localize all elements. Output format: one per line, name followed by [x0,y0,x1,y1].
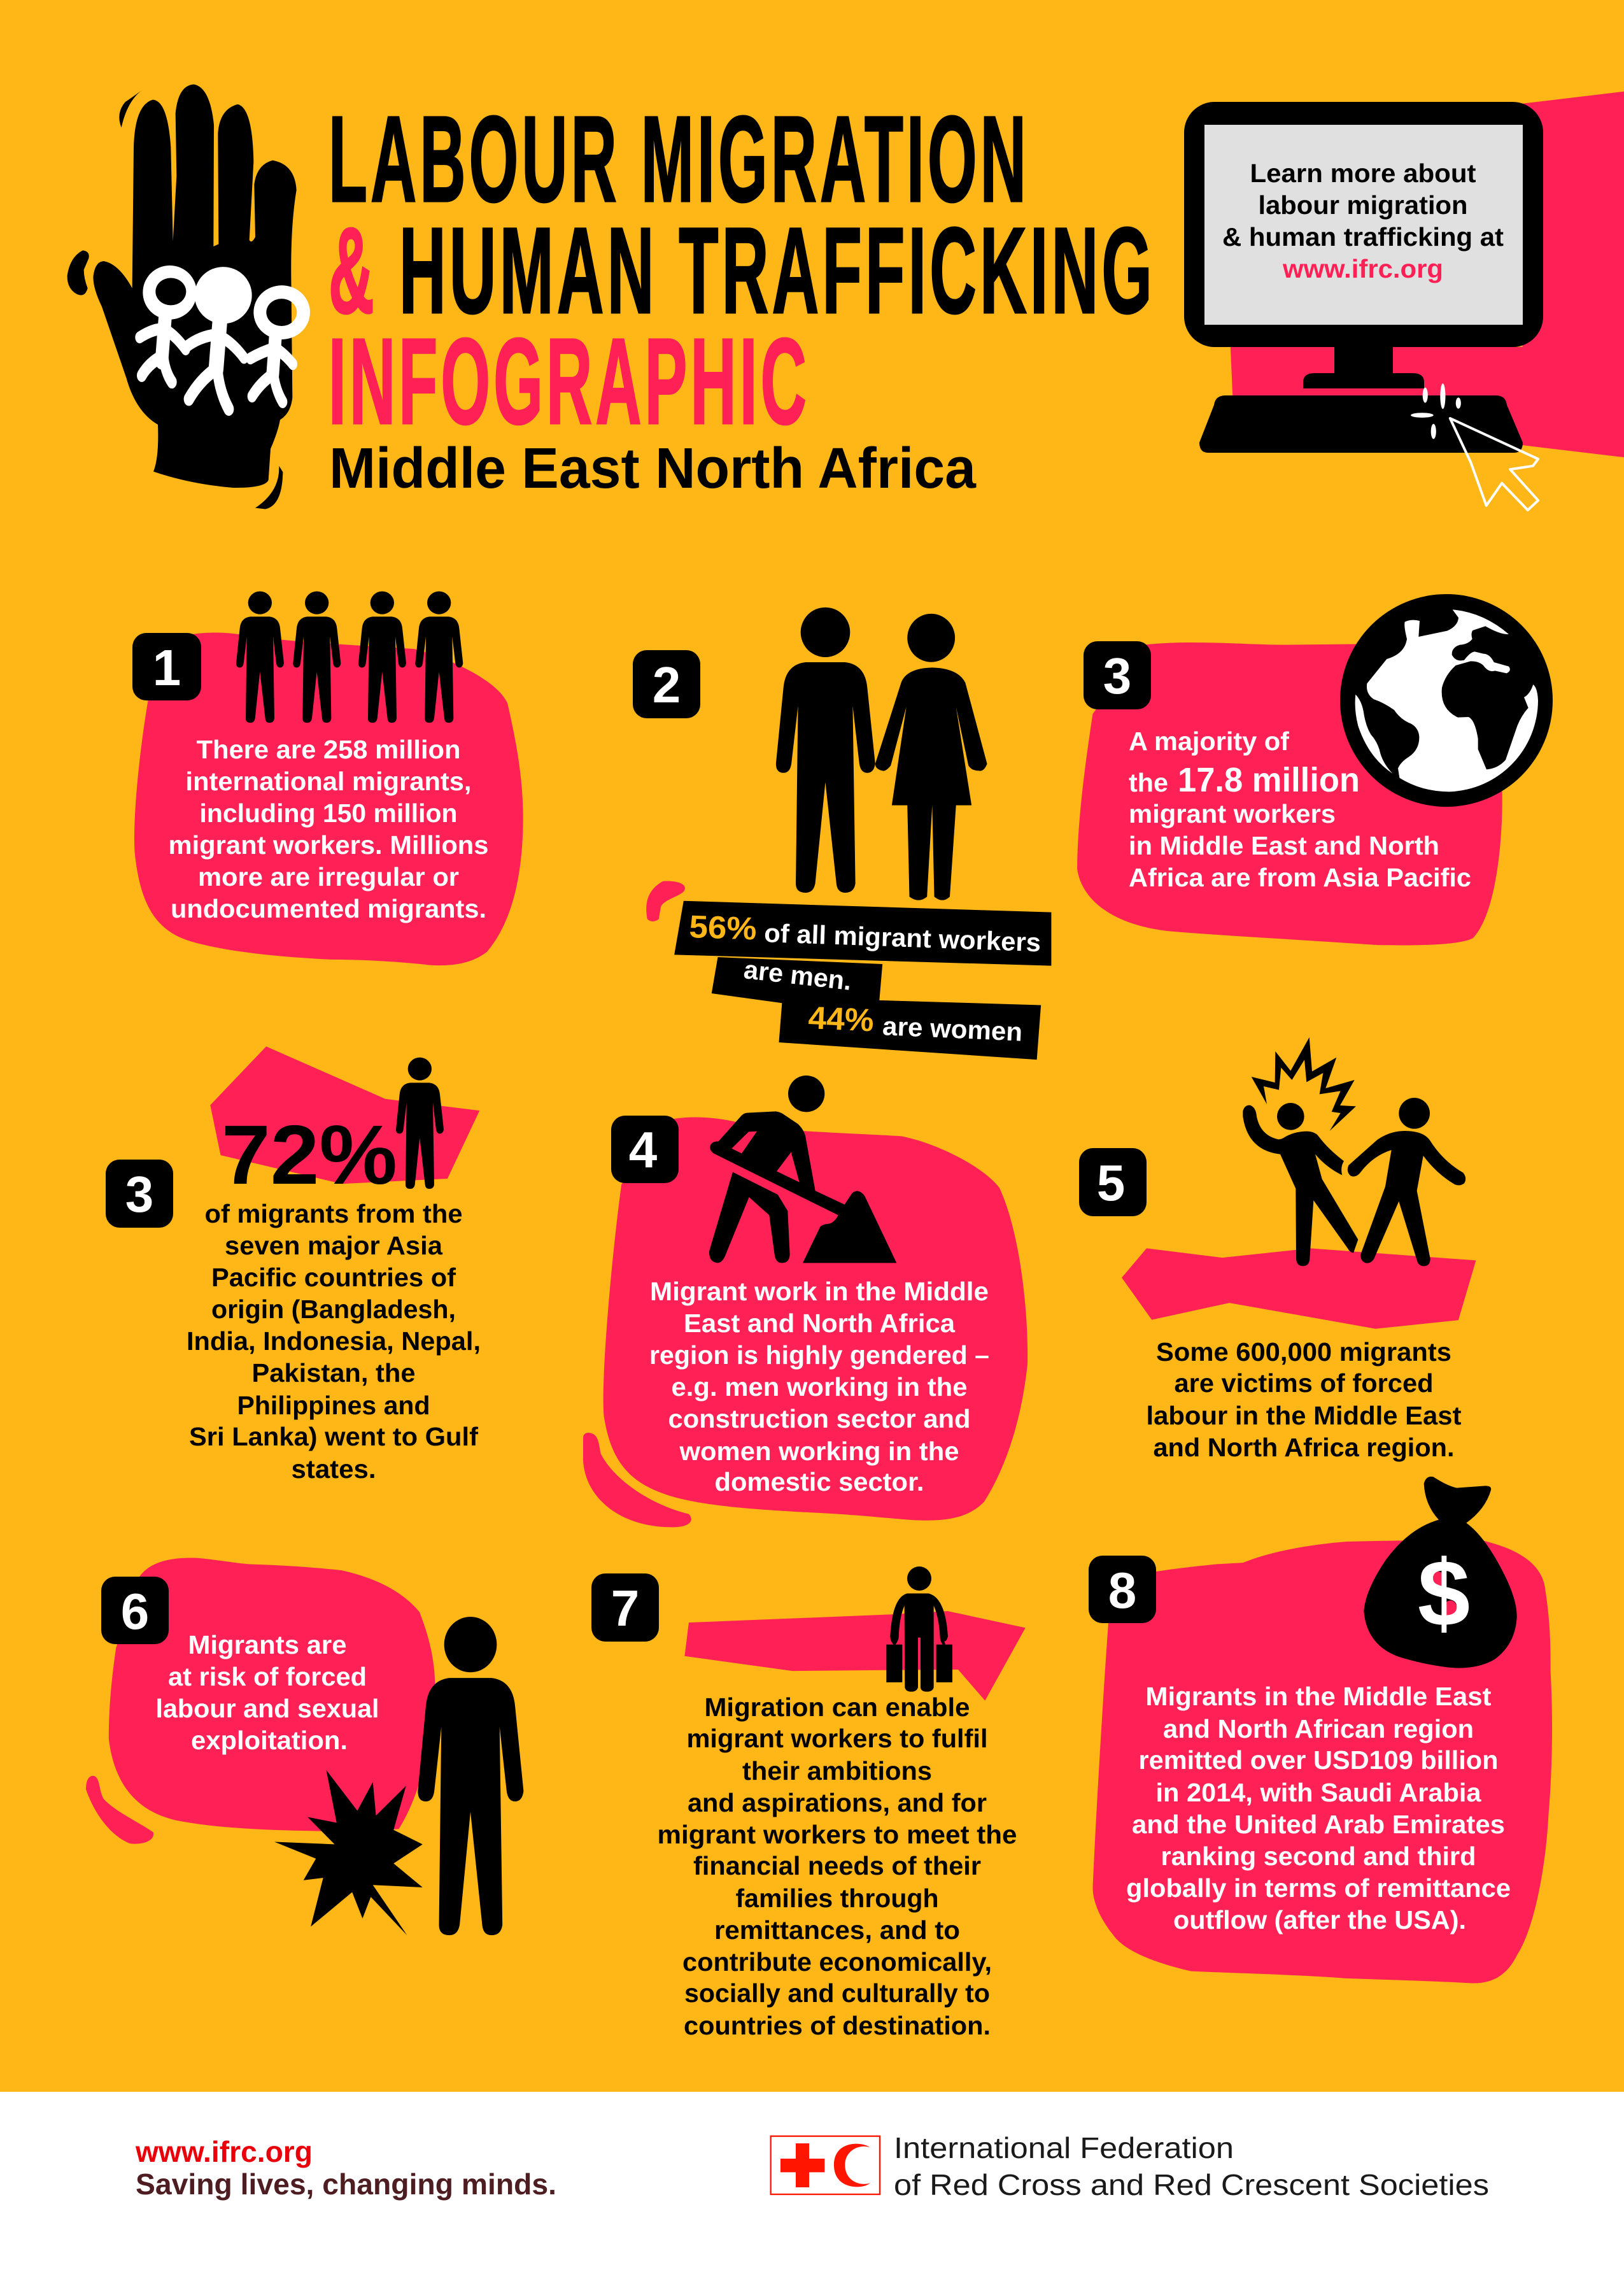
text: panel 4 [649,1277,989,1496]
text: panel 1: migrant workers. Millions [168,830,489,860]
text: panel 8: and the United Arab Emirates [1132,1810,1505,1839]
title [328,90,1155,501]
text: panel 4: construction sector and [668,1404,970,1433]
panel 1: migrants [134,592,523,965]
icon: person [396,1058,444,1189]
text: gulf states: Philippines and [237,1391,430,1420]
screen text: & human trafficking at [1222,222,1504,252]
title: INFOGRAPHIC [328,313,810,450]
footer tagline [135,2135,556,2201]
IFRC name [894,2131,1489,2201]
text: panel 8: remitted over USD109 billion [1138,1745,1499,1775]
text: panel 5: and North Africa region. [1154,1433,1454,1462]
text: gulf states: seven major Asia [225,1231,443,1260]
text: panel 3: migrant workers [1129,799,1336,828]
text: gulf states: origin (Bangladesh, [211,1295,456,1324]
icon: cursor [1411,383,1538,510]
panel: 72% gulf states [210,1046,479,1202]
badge 2: 2 [653,657,681,713]
badge 5 [1079,1148,1147,1216]
text: gulf states: states. [292,1454,376,1484]
text: gender split [689,909,1041,1047]
icon: money bag [1364,1477,1517,1668]
text: panel 1: including 150 million [200,799,457,828]
text: panel 7: migrant workers to fulfil [686,1724,988,1753]
badge 3 second: 3 [125,1166,153,1223]
text: gulf states: Pakistan, the [252,1358,415,1388]
icon: man [776,607,875,893]
text: panel 4: e.g. men working in the [671,1372,968,1402]
panel 8: remittances [1092,1540,1552,1984]
panel 2: woman and banners [646,614,1051,1060]
badge 7: 7 [611,1580,639,1636]
footer tagline: Saving lives, changing minds. [136,2168,556,2201]
text: panel 6: Migrants are [188,1630,346,1659]
text: panel 7: families through [736,1884,938,1913]
text: panel 3: Africa are from Asia Pacific [1129,863,1471,892]
badge 1: 1 [153,639,181,696]
text: panel 6: exploitation. [191,1726,348,1755]
text: panel 7: migrant workers to meet the [657,1820,1017,1849]
text: panel 1: There are 258 million [196,735,461,764]
icon: IFRC emblem [771,2136,880,2194]
panel 3: Asia Pacific [1077,643,1502,945]
text: panel 7: their ambitions [742,1756,932,1786]
text: panel 6: labour and sexual [155,1694,379,1723]
badge 8: 8 [1108,1562,1136,1619]
text: panel 1: undocumented migrants. [171,894,486,923]
text: panel 5 [1146,1337,1462,1462]
screen text: Learn more about [1250,159,1476,188]
text: gulf states: Pacific countries of [211,1263,456,1292]
text: panel 4: women working in the [679,1437,959,1466]
text: gender split: of all migrant workers [764,918,1041,957]
panel: learn more monitor [1184,92,1624,510]
text: gender split: 56% [689,909,758,947]
footer tagline: www.ifrc.org [135,2135,313,2168]
icon: explosion [274,1770,423,1935]
text: panel 7: socially and culturally to [684,1978,990,2008]
icon: four people [236,592,463,723]
text: panel 3 [1129,727,1471,892]
panel 4: gendered work [583,1118,1027,1527]
dollar sign: $ [1418,1541,1470,1646]
IFRC name: of Red Cross and Red Crescent Societies [894,2168,1489,2201]
badge 4: 4 [629,1121,658,1178]
text: panel 1: more are irregular or [198,862,459,891]
badge 3: 3 [1103,648,1131,704]
text: panel 4: domestic sector. [714,1467,924,1496]
text: panel 1: international migrants, [186,767,471,796]
text: panel 3: the [1129,768,1168,797]
text: panel 4: region is highly gendered – [649,1340,989,1370]
text: panel 3: 17.8 million [1178,761,1360,799]
text: panel 8: outflow (after the USA). [1173,1905,1466,1935]
IFRC name: International Federation [894,2131,1234,2164]
icon: standing person [418,1617,523,1935]
badge 5: 5 [1097,1154,1125,1211]
text: gulf states: India, Indonesia, Nepal, [187,1326,481,1356]
text: panel 5: labour in the Middle East [1146,1401,1462,1430]
text: panel 7: remittances, and to [714,1915,960,1945]
text: panel 1 [168,735,489,923]
badge 7 [591,1573,659,1642]
text: panel 7: countries of destination. [684,2011,991,2040]
badge 1 [132,633,201,700]
text: panel 6 [155,1630,379,1755]
text: panel 7 [657,1693,1017,2040]
badge 6 [101,1577,169,1644]
text: gulf states [187,1199,481,1484]
screen text [1222,159,1504,283]
text: panel 8: Migrants in the Middle East [1146,1682,1492,1711]
badge 3 second [106,1160,173,1228]
text: gender split: 44% [808,1000,875,1038]
badge 2 [633,650,700,718]
big number: 72% [222,1108,397,1202]
icon: globe [1340,594,1553,807]
icon: two people with burst [1243,1037,1465,1266]
text: panel 7: and aspirations, and for [688,1788,987,1817]
text: panel 5: Some 600,000 migrants [1156,1337,1451,1367]
icon: worker with shovel [709,1076,896,1263]
badge 6: 6 [121,1583,149,1640]
icon: person with suitcases [886,1566,952,1692]
text: panel 7: Migration can enable [704,1693,970,1722]
text: panel 4: Migrant work in the Middle [650,1277,989,1306]
icon: hand with family [67,85,310,509]
text: panel 5: are victims of forced [1174,1368,1434,1398]
text: panel 6: at risk of forced [168,1662,367,1691]
text: panel 4: East and North Africa [684,1309,956,1338]
text: panel 8: globally in terms of remittance [1126,1873,1511,1903]
screen text: www.ifrc.org [1282,254,1443,283]
text: panel 7: financial needs of their [693,1851,981,1880]
title: Middle East North Africa [329,437,977,501]
badge 3 [1084,641,1151,709]
text: gulf states: Sri Lanka) went to Gulf [189,1422,478,1451]
panel 5: forced labour [1122,1037,1476,1329]
text: panel 8: ranking second and third [1161,1842,1476,1871]
text: panel 8: in 2014, with Saudi Arabia [1156,1778,1482,1807]
text: panel 3: in Middle East and North [1129,831,1439,860]
screen text: labour migration [1258,190,1468,220]
text: panel 8: and North African region [1163,1714,1474,1743]
title: & [328,202,378,339]
text: gulf states: of migrants from the [205,1199,462,1228]
panel 7: ambitions [684,1566,1026,1701]
text: panel 3: A majority of [1129,727,1289,756]
text: gender split: are women [882,1011,1023,1047]
badge 8 [1089,1556,1156,1623]
text: panel 7: contribute economically, [682,1947,992,1977]
footer [0,2092,1624,2279]
text: gender split: are men. [742,955,853,996]
panel 6: exploitation [86,1558,435,1935]
badge 4 [611,1116,679,1183]
text: panel 8 [1126,1682,1511,1935]
